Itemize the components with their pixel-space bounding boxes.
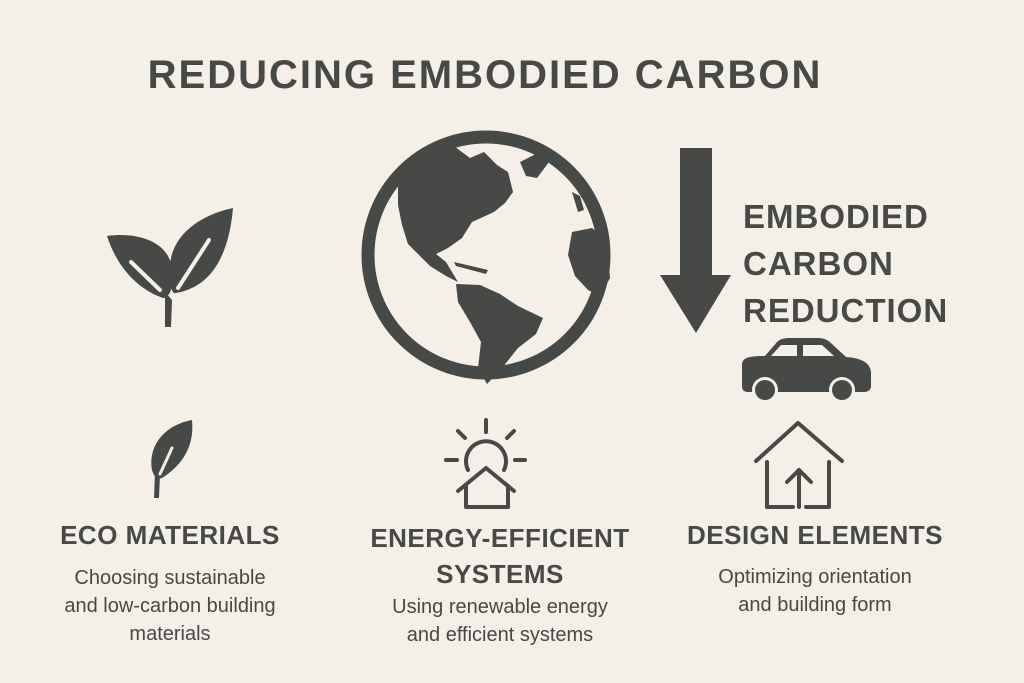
body bbox=[64, 567, 276, 645]
text: embodied carbon reduction: EMBODIED bbox=[743, 198, 929, 235]
icon: car bbox=[742, 338, 871, 403]
icon: sun house bbox=[446, 420, 525, 507]
icon: house with up arrow bbox=[756, 423, 842, 507]
body bbox=[718, 566, 912, 616]
icon: globe bbox=[368, 137, 610, 384]
body: and low-carbon building bbox=[64, 595, 276, 617]
panel: design elements bbox=[687, 520, 943, 616]
text: embodied carbon reduction: REDUCTION bbox=[743, 292, 948, 329]
arrow: down bbox=[660, 148, 731, 333]
panel: energy-efficient systems bbox=[370, 523, 630, 646]
heading: ECO MATERIALS bbox=[60, 520, 280, 550]
body: and building form bbox=[738, 594, 892, 616]
body: Using renewable energy bbox=[392, 596, 608, 618]
text: embodied carbon reduction: CARBON bbox=[743, 245, 894, 282]
body bbox=[392, 596, 608, 646]
text: embodied carbon reduction bbox=[743, 198, 948, 329]
heading: DESIGN ELEMENTS bbox=[687, 520, 943, 550]
body: Choosing sustainable bbox=[74, 567, 266, 589]
heading bbox=[370, 523, 630, 589]
body: and efficient systems bbox=[407, 624, 593, 646]
heading: ENERGY-EFFICIENT bbox=[370, 523, 630, 553]
body: materials bbox=[129, 623, 211, 645]
title: REDUCING EMBODIED CARBON bbox=[148, 53, 822, 97]
body: Optimizing orientation bbox=[718, 566, 912, 588]
icon: small leaf bbox=[151, 420, 192, 498]
panel: eco materials bbox=[60, 520, 280, 645]
heading: SYSTEMS bbox=[436, 559, 564, 589]
icon: twin leaves bbox=[107, 208, 233, 327]
